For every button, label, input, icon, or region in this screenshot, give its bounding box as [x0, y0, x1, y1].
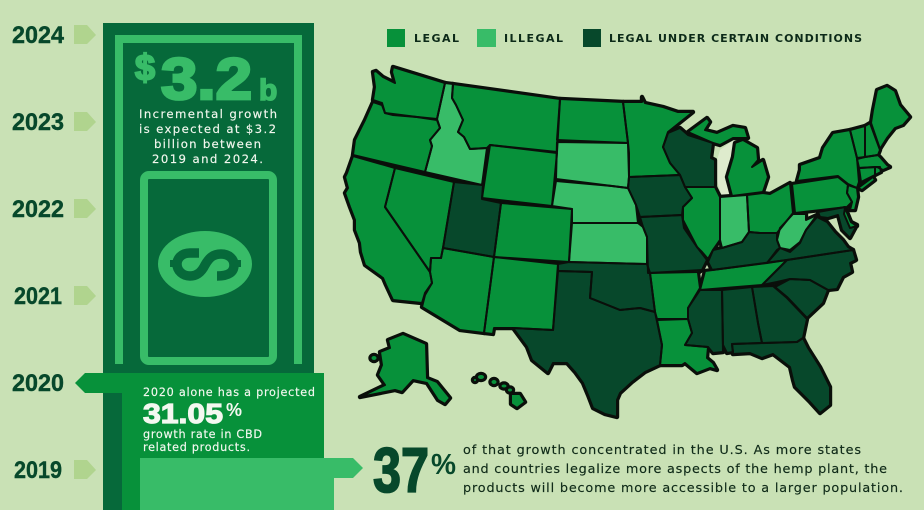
big number: 37 percent: % [431, 449, 456, 481]
big number: 3.2 billion: 3.2 [161, 47, 252, 112]
map outer coastline [345, 67, 910, 417]
state: North Dakota [557, 99, 628, 143]
state: Tennessee [700, 260, 787, 290]
timeline year labels: 2023 [12, 109, 64, 136]
callout: 2020 growth rate [143, 386, 315, 454]
legend: LEGAL [414, 32, 459, 45]
timeline year labels: 2020 [12, 370, 64, 397]
big number: 3.2 billion: $ [135, 47, 155, 88]
state: Delaware [844, 208, 857, 228]
state: Oregon [353, 102, 440, 172]
panel: 2020 mid green band [75, 373, 324, 510]
Lake Michigan [717, 139, 735, 197]
text: 37 percent explanation: and countries legalize more aspects of the hemp plant, the [463, 462, 887, 477]
state: Pennsylvania [792, 177, 852, 213]
state: Arizona [422, 248, 494, 333]
state: Wyoming [482, 145, 557, 206]
state: New York [797, 130, 859, 188]
big number: 3.2 billion: b [259, 74, 277, 107]
state: South Dakota [556, 142, 629, 188]
state: West Virginia [777, 214, 817, 250]
state: Louisiana [657, 319, 717, 373]
text: incremental growth: Incremental growth [139, 107, 277, 121]
timeline year labels: 2024 [12, 22, 64, 49]
state: Nebraska [552, 181, 638, 223]
legend: LEGAL UNDER CERTAIN CONDITIONS [609, 32, 862, 45]
callout: 2020 growth rate: 31.05 [143, 398, 223, 429]
banknote frame [119, 39, 298, 364]
state: Illinois [683, 187, 720, 259]
state: Connecticut [859, 167, 875, 182]
text: 37 percent explanation: of that growth concentrated in the U.S. As more states [463, 443, 861, 458]
state: North Carolina [762, 250, 856, 290]
panel: 2019 light green band with arrow [140, 458, 363, 510]
state: Washington [373, 67, 445, 119]
big number: 3.2 billion [135, 47, 277, 112]
panel: dark green money column [103, 23, 314, 510]
state: New Hampshire [865, 123, 880, 157]
icon: banknote with dollar sign [144, 175, 273, 361]
state: Nevada [385, 168, 454, 272]
map inner state borders [345, 67, 910, 417]
callout: 2020 growth rate: % [226, 400, 242, 420]
text: incremental growth: is expected at $3.2 [139, 122, 276, 136]
state: Alabama [722, 287, 762, 353]
legend: ILLEGAL [504, 32, 563, 45]
state: Indiana [720, 195, 749, 248]
state: Vermont [850, 126, 865, 158]
state: Oklahoma [558, 262, 655, 312]
state: Ohio [747, 183, 793, 233]
state: Arkansas [650, 270, 702, 319]
text: 37 percent explanation: products will become more accessible to a larger population. [463, 481, 903, 496]
state: Long Island [858, 177, 875, 190]
text: incremental growth [139, 107, 277, 166]
state: Virginia [767, 217, 853, 263]
state: Maine [871, 86, 910, 149]
timeline chevron markers [74, 25, 96, 479]
state: Wisconsin [663, 128, 715, 187]
callout: 2020 growth rate: related products. [143, 441, 250, 454]
state: Idaho [425, 83, 487, 185]
text: incremental growth: billion between [154, 137, 261, 151]
callout: 2020 growth rate: 2020 alone has a projected [143, 386, 315, 399]
state: Florida [732, 338, 830, 413]
text: incremental growth: 2019 and 2024. [152, 152, 263, 166]
state: Iowa [628, 175, 692, 217]
state: Michigan upper peninsula [688, 118, 748, 145]
timeline year labels: 2022 [12, 196, 64, 223]
callout: 2020 growth rate: growth rate in CBD [143, 428, 262, 441]
legend [387, 29, 862, 47]
state: Georgia [752, 286, 807, 343]
state: Colorado [494, 203, 572, 262]
state: Texas [513, 271, 662, 417]
state: Maryland [818, 207, 857, 238]
text: 37 percent explanation [463, 443, 903, 496]
timeline year labels: 2019 [14, 457, 62, 484]
timeline year labels [12, 22, 64, 484]
state: Rhode Island [875, 167, 881, 175]
US map [345, 67, 910, 417]
state: Alaska [360, 334, 450, 404]
state: California [345, 156, 432, 303]
state: Montana [452, 84, 560, 152]
state: Mississippi [685, 290, 723, 353]
big number: 37 percent: 37 [373, 436, 429, 506]
state: Missouri [640, 215, 707, 273]
state: New Mexico [484, 257, 558, 334]
state: South Carolina [775, 279, 828, 318]
state: Kentucky [708, 232, 780, 270]
state: Hawaii [473, 374, 525, 408]
state: New Jersey [847, 185, 858, 210]
timeline year labels: 2021 [14, 283, 62, 310]
state: Utah [443, 182, 501, 257]
state: Massachusetts [857, 155, 890, 170]
state: Minnesota [623, 97, 693, 177]
state: Kansas [569, 223, 647, 264]
state: Michigan lower peninsula [727, 140, 768, 196]
